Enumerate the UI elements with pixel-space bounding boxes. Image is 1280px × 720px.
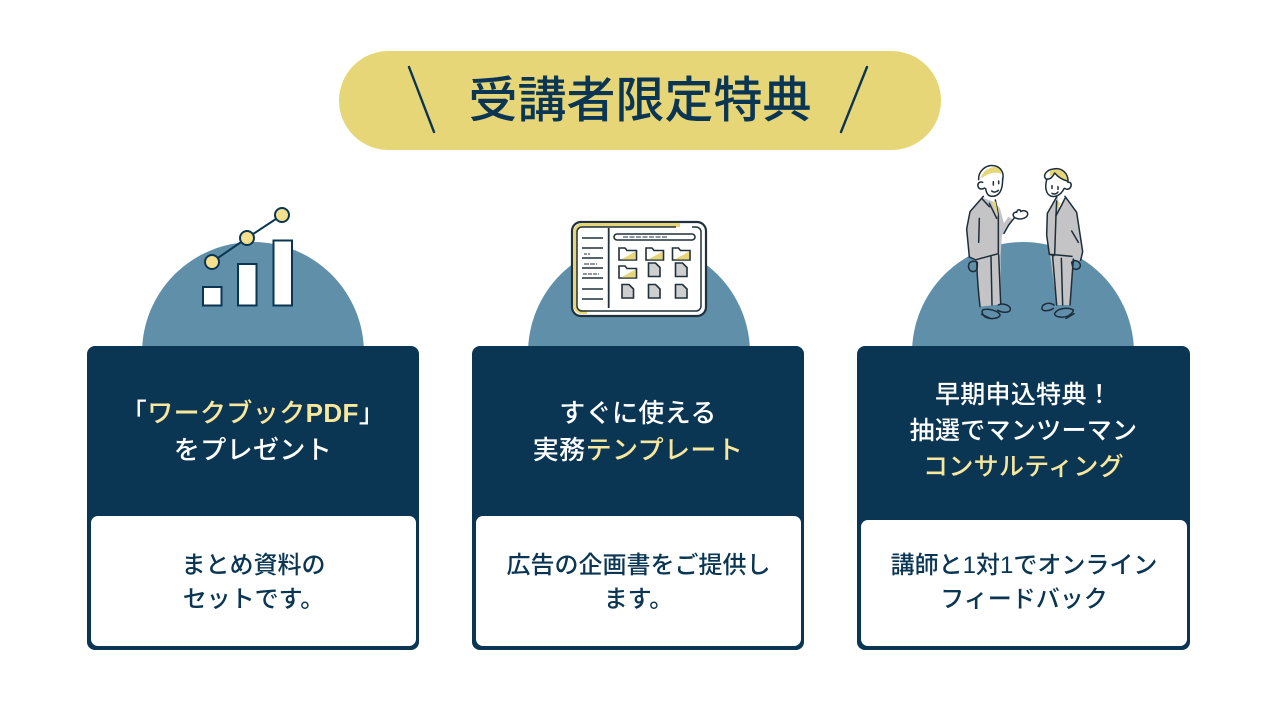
card 3 heading: 抽選でマンツーマン xyxy=(910,417,1137,445)
card 2 heading xyxy=(533,398,743,465)
person left xyxy=(967,166,1028,319)
card 1 body text: セットです。 xyxy=(183,586,324,613)
card 2 body panel xyxy=(476,516,801,646)
card 1 body text xyxy=(182,552,326,613)
title: 受講者限定特典 xyxy=(468,74,812,128)
card 3 heading xyxy=(910,381,1137,481)
card 1 xyxy=(87,346,419,650)
title slash right xyxy=(840,66,868,134)
card 3 heading: コンサルティング xyxy=(923,453,1124,481)
card 2 body text xyxy=(506,552,770,613)
card 2 xyxy=(472,346,804,650)
card 2 heading: すぐに使える xyxy=(559,398,717,428)
card 1 heading xyxy=(121,398,385,465)
card 3 body text: 講師と1対1でオンライン xyxy=(891,552,1157,579)
card 1 heading: 「ワークブックPDF」 xyxy=(121,398,385,428)
card 1 heading: をプレゼント xyxy=(174,435,332,465)
card 3 body text xyxy=(891,552,1157,613)
card 3 heading: 早期申込特典！ xyxy=(935,381,1112,409)
icon: bar chart xyxy=(202,207,293,306)
semicircle 1 xyxy=(142,242,364,353)
card 2 body text: ます。 xyxy=(604,586,673,613)
card 2 body text: 広告の企画書をご提供し xyxy=(506,552,770,579)
card 3 body text: フィードバック xyxy=(940,586,1108,613)
card 1 body panel xyxy=(91,516,416,646)
title banner xyxy=(339,51,941,150)
icon: file browser window xyxy=(570,220,708,318)
card 1 body text: まとめ資料の xyxy=(182,552,326,579)
title slash left xyxy=(408,66,436,134)
semicircle 3 xyxy=(912,242,1134,353)
semicircle 2 xyxy=(528,242,750,353)
card 3 xyxy=(857,346,1190,650)
card 2 heading: 実務テンプレート xyxy=(533,435,743,465)
person right xyxy=(1042,169,1083,318)
card 3 body panel xyxy=(861,520,1187,646)
illustration: two business people xyxy=(966,164,1084,320)
